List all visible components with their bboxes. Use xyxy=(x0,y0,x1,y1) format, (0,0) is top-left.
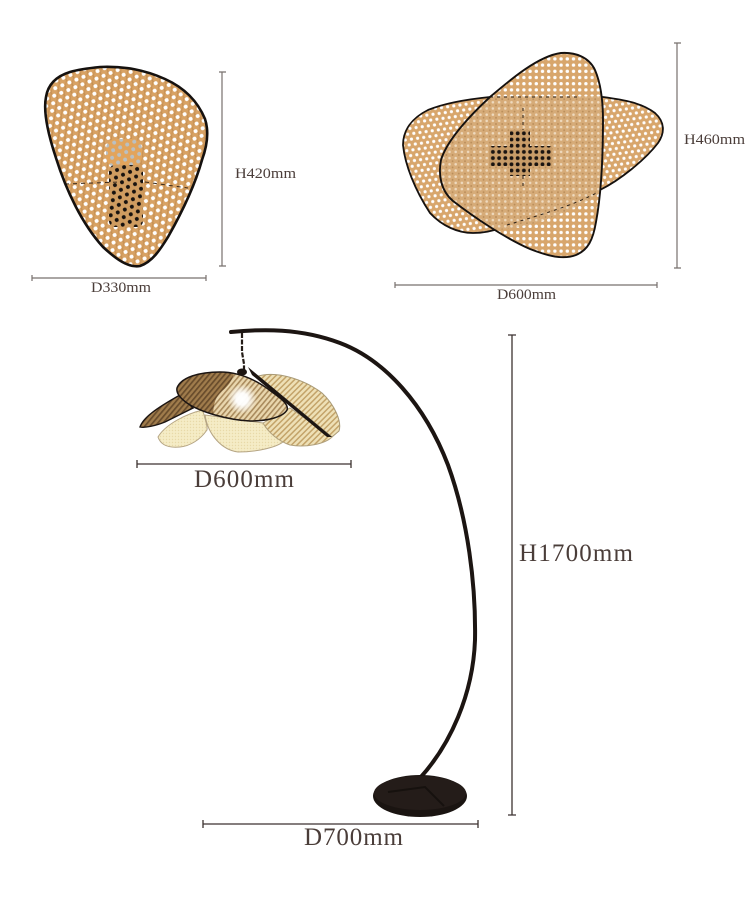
panel: single shade top view xyxy=(32,67,297,296)
dimension: diameter 600 xyxy=(395,282,657,303)
dimension: shade diameter: D600mm xyxy=(194,466,295,493)
lower left petal xyxy=(158,410,207,447)
dimension: height 460: H460mm xyxy=(684,132,746,148)
marble base xyxy=(373,775,467,817)
dimension: shade diameter xyxy=(137,460,351,493)
rear rattan disc xyxy=(403,97,663,233)
dimension: diameter 600: D600mm xyxy=(497,287,557,303)
dimension: diameter 330 xyxy=(32,275,206,296)
lower centre petal xyxy=(205,415,284,452)
right petal xyxy=(258,374,340,437)
dimension: diameter 330: D330mm xyxy=(91,280,152,296)
dimension: height 460 xyxy=(674,43,746,268)
dimension: height 420 xyxy=(219,72,297,266)
glowing bulb xyxy=(227,384,257,414)
dimension: total height xyxy=(508,335,634,815)
dimension: height 420: H420mm xyxy=(235,166,297,182)
panel: floor lamp xyxy=(137,330,634,851)
lamp socket xyxy=(237,368,247,376)
lamp arc stand xyxy=(231,330,475,792)
panel: double shade top view xyxy=(395,43,746,303)
hanging chain xyxy=(242,333,244,372)
dimension: total height: H1700mm xyxy=(519,540,634,567)
lower right petal xyxy=(263,408,332,446)
dimension: base reach xyxy=(203,820,478,851)
main top petal xyxy=(176,371,288,422)
front rattan disc xyxy=(440,53,604,257)
left dark petal xyxy=(140,395,193,427)
pendant shade xyxy=(140,365,340,452)
edge-on blade petal xyxy=(248,367,332,437)
rattan shade disc xyxy=(45,67,207,266)
dimension: base reach: D700mm xyxy=(304,824,404,851)
